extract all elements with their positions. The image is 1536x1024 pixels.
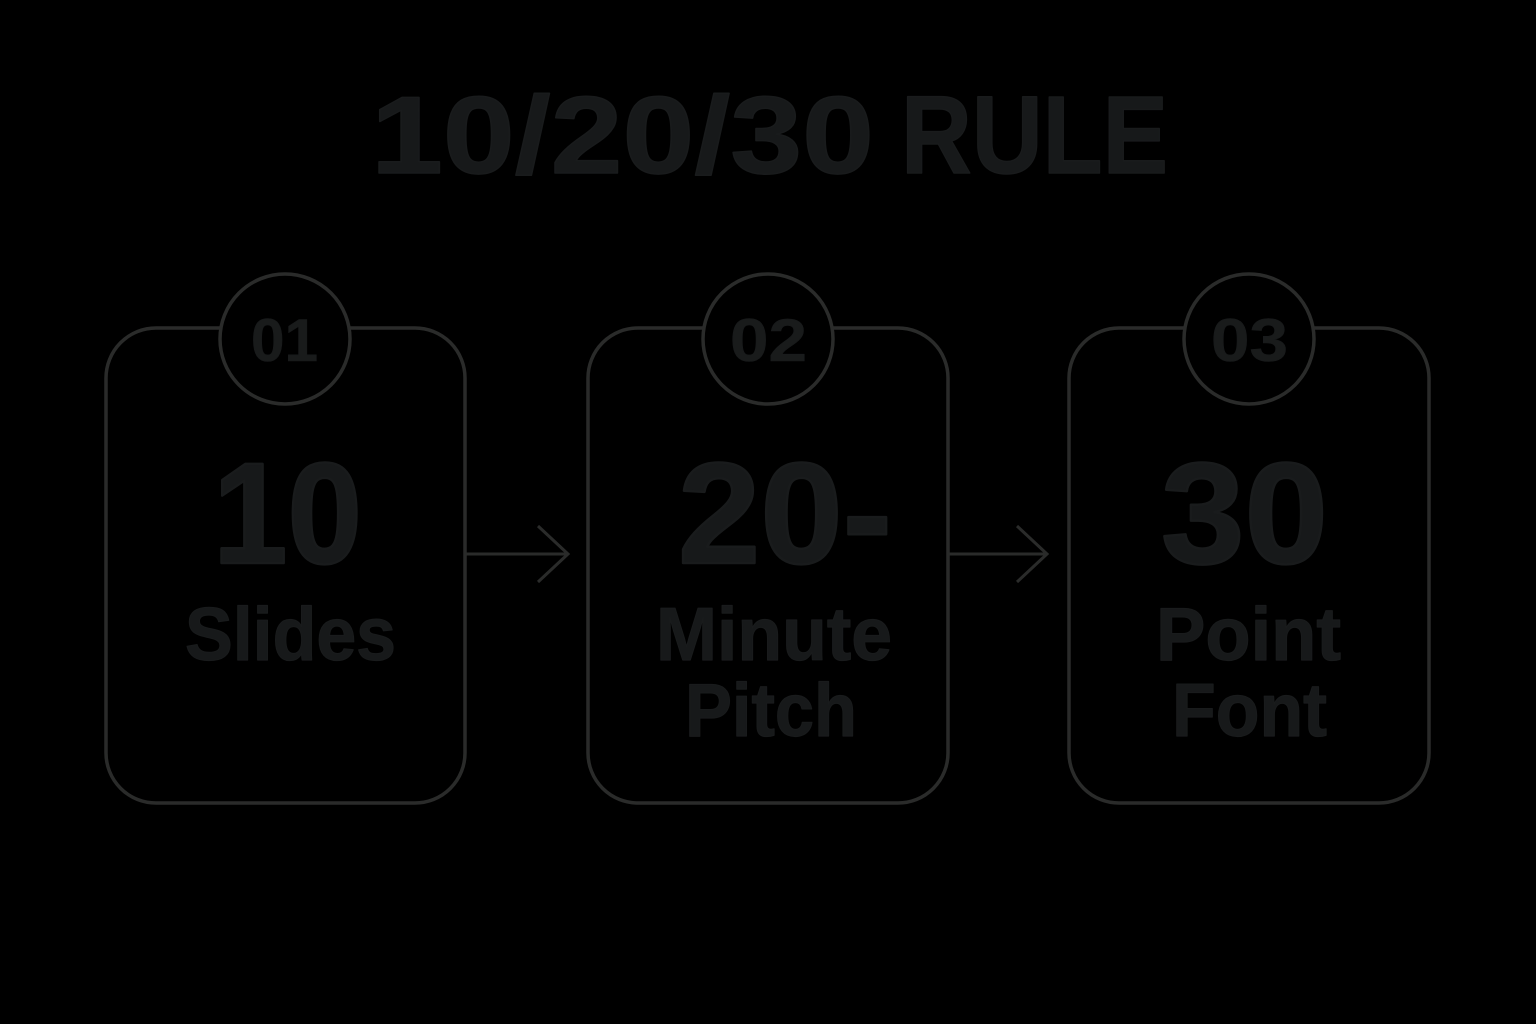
panel: 30 point font xyxy=(1069,274,1429,803)
step badge 02 xyxy=(703,274,833,404)
label Slides: Slides xyxy=(185,592,396,676)
card outline 2 xyxy=(588,328,948,803)
big number 20-: 20- xyxy=(678,433,892,594)
title: 10/20/30 xyxy=(371,74,874,197)
step badge 01 xyxy=(220,274,350,404)
card outline 1 xyxy=(106,328,465,803)
step badge 03: 03 xyxy=(1211,307,1288,374)
panel: 20-minute pitch xyxy=(588,274,948,803)
title xyxy=(371,74,1168,197)
label Point Font: Point xyxy=(1156,592,1341,676)
title: RULE xyxy=(901,74,1168,197)
step badge 01: 01 xyxy=(251,307,318,374)
label Point Font xyxy=(1156,592,1341,752)
label Point Font: Font xyxy=(1172,668,1327,752)
big number 30: 30 xyxy=(1161,433,1328,594)
big number 10: 10 xyxy=(213,433,362,594)
label Minute Pitch: Minute xyxy=(656,592,892,676)
panel: 10 slides xyxy=(106,274,465,803)
arrow 2 to 3 xyxy=(948,526,1047,582)
label Minute Pitch xyxy=(656,592,892,752)
arrow 1 to 2 xyxy=(466,526,568,582)
label Minute Pitch: Pitch xyxy=(685,668,857,752)
step badge 02: 02 xyxy=(730,307,807,374)
step badge 03 xyxy=(1184,274,1314,404)
card outline 3 xyxy=(1069,328,1429,803)
